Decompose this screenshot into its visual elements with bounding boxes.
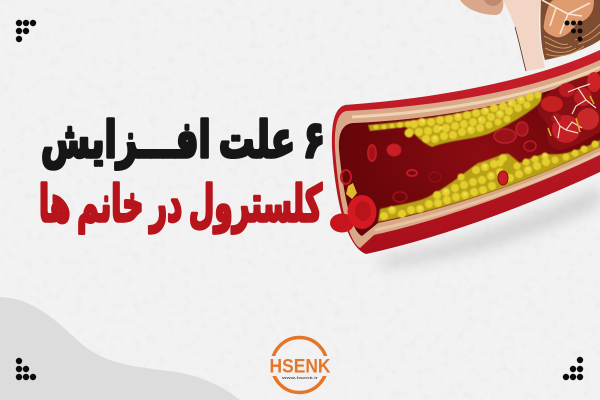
upper wall highlight <box>352 67 600 117</box>
lower wall highlight <box>375 153 600 230</box>
brain lobe <box>460 0 503 15</box>
artery shadow <box>380 185 600 268</box>
logo url: www.hsenk.ir <box>281 375 319 380</box>
blood cells in lumen <box>341 122 536 202</box>
icon: top-right dot cluster <box>564 20 582 42</box>
logo wordmark: HSENK <box>270 356 330 378</box>
lumen <box>339 71 600 236</box>
illustration: brain and brain stem <box>460 0 600 71</box>
brain stem <box>503 0 545 71</box>
icon: bottom-left dot cluster <box>16 358 36 380</box>
logo ring <box>272 338 327 392</box>
clot with white veins <box>537 72 600 150</box>
grey wave shape <box>0 297 240 400</box>
icon: bottom-right dot cluster <box>563 357 583 380</box>
yellow fat fleck <box>346 183 357 199</box>
logo band <box>266 356 334 376</box>
title line 2: کلسترول در خانم ها <box>39 175 323 234</box>
stem outline <box>515 27 526 71</box>
logo: HSENK <box>266 338 334 392</box>
lower plaque <box>378 140 600 222</box>
outer red wall <box>332 50 600 254</box>
cerebellum stripes <box>544 24 600 56</box>
title line 1: ۶ علت افـــزایش <box>41 111 325 170</box>
upper plaque <box>368 91 542 147</box>
cerebellum light lobe <box>544 0 594 37</box>
illustration: artery <box>330 50 600 268</box>
cream wall band <box>335 60 600 248</box>
small red blood cell <box>330 214 354 232</box>
red cell in plaque <box>498 171 508 185</box>
large red blood cell <box>348 195 376 229</box>
cerebellum dark base <box>540 0 600 60</box>
cerebellum white branches <box>542 0 590 34</box>
icon: top-left dot cluster <box>16 20 36 42</box>
brain lobe fold <box>484 0 502 6</box>
